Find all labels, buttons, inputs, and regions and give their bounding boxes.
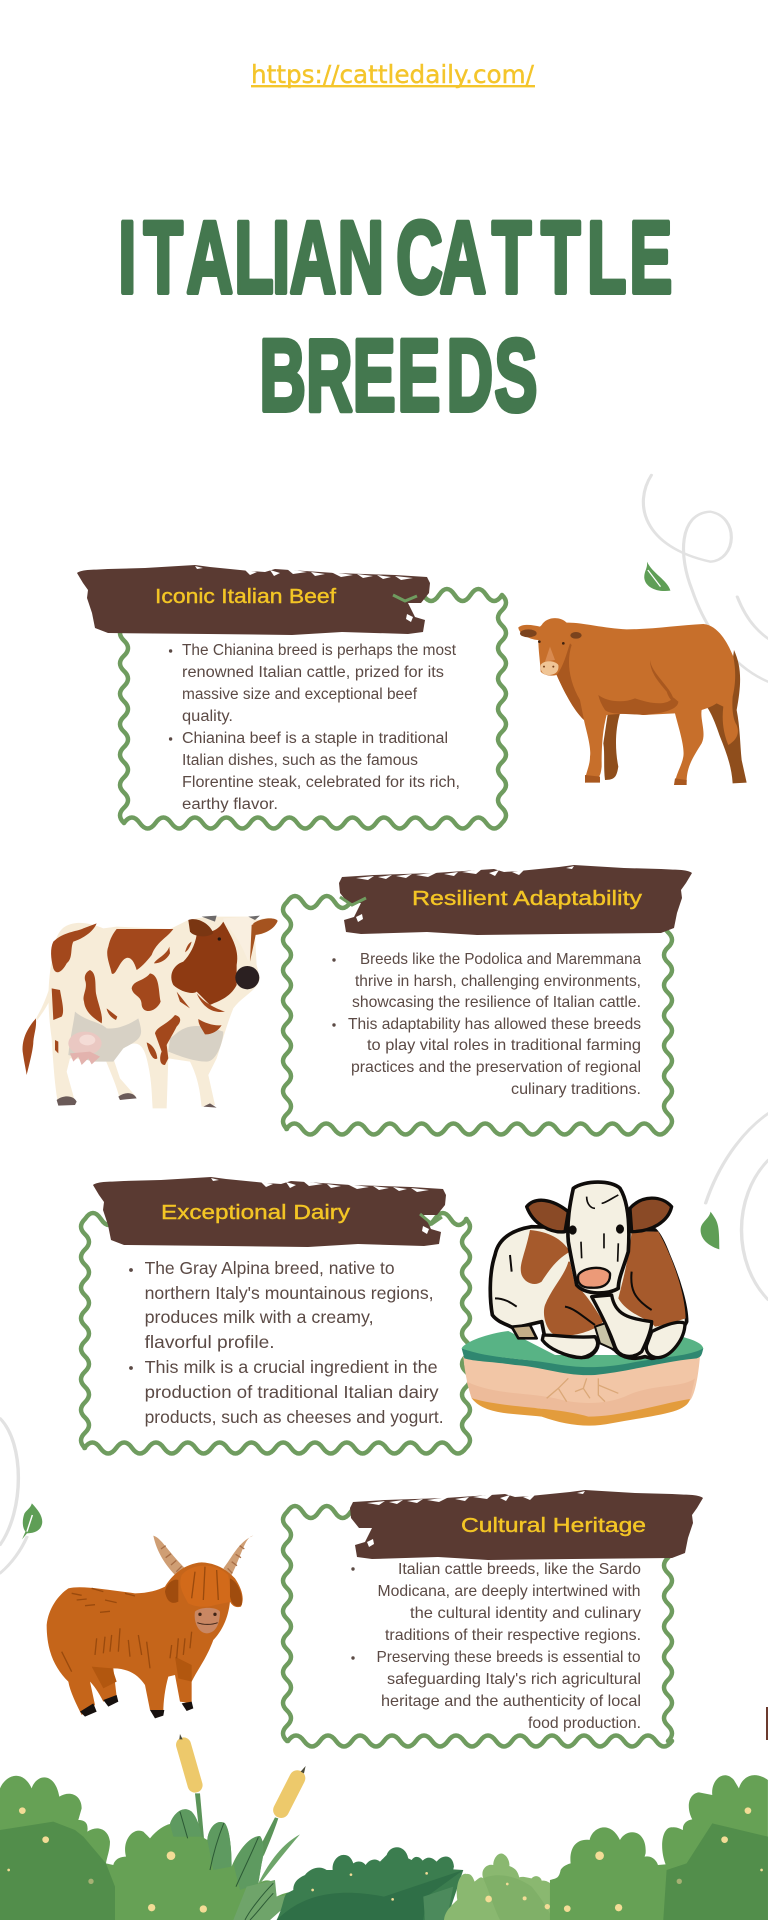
bullet list 1: Chianina beef is a staple in traditional [182,730,448,747]
heading banner 3 [93,1177,446,1247]
bullet list 3: flavorful profile. [145,1332,275,1352]
bush center light [444,1854,569,1920]
bullet list 1: The Chianina breed is perhaps the most [182,642,457,659]
frame fragment through banner 1 [393,595,417,601]
bush right [550,1775,768,1920]
decorative swirl: middle right [706,1113,768,1300]
icon: seated cow on soil [462,1182,703,1426]
bullet list 1: massive size and exceptional beef [182,686,418,703]
wavy frame 3 [81,1213,470,1454]
bushes and reeds [0,1734,768,1920]
heading 3: Exceptional Dairy [161,1202,350,1224]
bullet list 4: traditions of their respective regions. [385,1627,641,1644]
bullet list 1: earthy flavor. [182,796,278,813]
bullet list 2: This adaptability has allowed these breeds [348,1016,641,1033]
bullet list 4: Preserving these breeds is essential to [376,1649,641,1666]
bullet list 2: practices and the preservation of regional [351,1059,641,1076]
bullet list 2: to play vital roles in traditional farming [367,1037,641,1054]
bullet list 3: This milk is a crucial ingredient in the [145,1357,438,1377]
icon: leaf left [22,1503,42,1539]
edge mark right [766,1707,768,1740]
bullet list 3: produces milk with a creamy, [145,1307,374,1327]
bullet list 3: northern Italy's mountainous regions, [145,1283,434,1303]
decorative swirl: upper right [643,475,768,682]
bullet list 4: Modicana, are deeply intertwined with [378,1583,640,1600]
bullet list 2: thrive in harsh, challenging environments, [355,973,641,990]
icon: spotted dairy cow [23,916,278,1108]
reed stem 1 [195,1793,204,1838]
bullet list 2 [332,951,641,1098]
heading 2: Resilient Adaptability [412,888,642,910]
bullet list 3: products, such as cheeses and yogurt. [145,1407,444,1427]
bullet list 4: the cultural identity and culinary [410,1605,641,1622]
decorative swirl: left [0,1418,27,1573]
heading banner 4 [350,1490,703,1560]
title [118,202,672,433]
bullet list 3 [129,1258,444,1427]
heading banner 1 [77,565,430,635]
bullet list 2: showcasing the resilience of Italian cattle. [352,994,641,1011]
long grass blade [258,1834,300,1883]
wavy frame 4 [283,1506,672,1746]
bullet list 1: quality. [182,708,233,725]
icon: orange cow [518,618,747,785]
bullet list 1: Italian dishes, such as the famous [182,752,418,769]
bullet list 2: culinary traditions. [511,1081,641,1098]
bullet list 3: production of traditional Italian dairy [145,1382,439,1402]
bullet list 4: Italian cattle breeds, like the Sardo [398,1561,641,1578]
bullet list 4: food production. [528,1715,641,1732]
heading 4: Cultural Heritage [461,1515,646,1537]
icon: leaf upper right [644,562,670,591]
bullet list 2: Breeds like the Podolica and Maremmana [360,951,641,968]
title: ITALIAN CATTLE [118,202,672,315]
bush dots [7,1807,763,1913]
frame fragment through banner 2 [340,897,366,905]
reed head 1 [174,1734,204,1794]
frame fragment through banner 3 [420,1214,442,1224]
heading banner 2 [339,865,692,935]
bullet list 4: heritage and the authenticity of local [381,1693,641,1710]
url link: https://cattledaily.com/ [251,60,535,89]
bullet list 4 [351,1561,641,1732]
panel: resilient adaptability [283,865,692,1134]
panel: iconic italian beef [77,565,506,828]
bush center dark [277,1847,463,1920]
wavy frame 2 [283,896,672,1134]
bush left [0,1776,300,1920]
bullet list 4: safeguarding Italy's rich agricultural [387,1671,641,1688]
panel: cultural heritage [283,1490,703,1746]
panel: exceptional dairy [81,1177,470,1454]
bullet list 1: Florentine steak, celebrated for its rich, [182,774,460,791]
heading 1: Iconic Italian Beef [155,586,337,608]
bullet list 3: The Gray Alpina breed, native to [145,1258,395,1278]
bullet list 1: renowned Italian cattle, prized for its [182,664,444,681]
wavy frame 1 [120,589,506,828]
reed stem 2 [262,1817,278,1857]
title: BREEDS [260,320,537,433]
reed head 2 [270,1766,308,1821]
icon: leaf right [701,1212,719,1249]
icon: highland cow [47,1536,253,1718]
bullet list 1 [169,642,460,813]
